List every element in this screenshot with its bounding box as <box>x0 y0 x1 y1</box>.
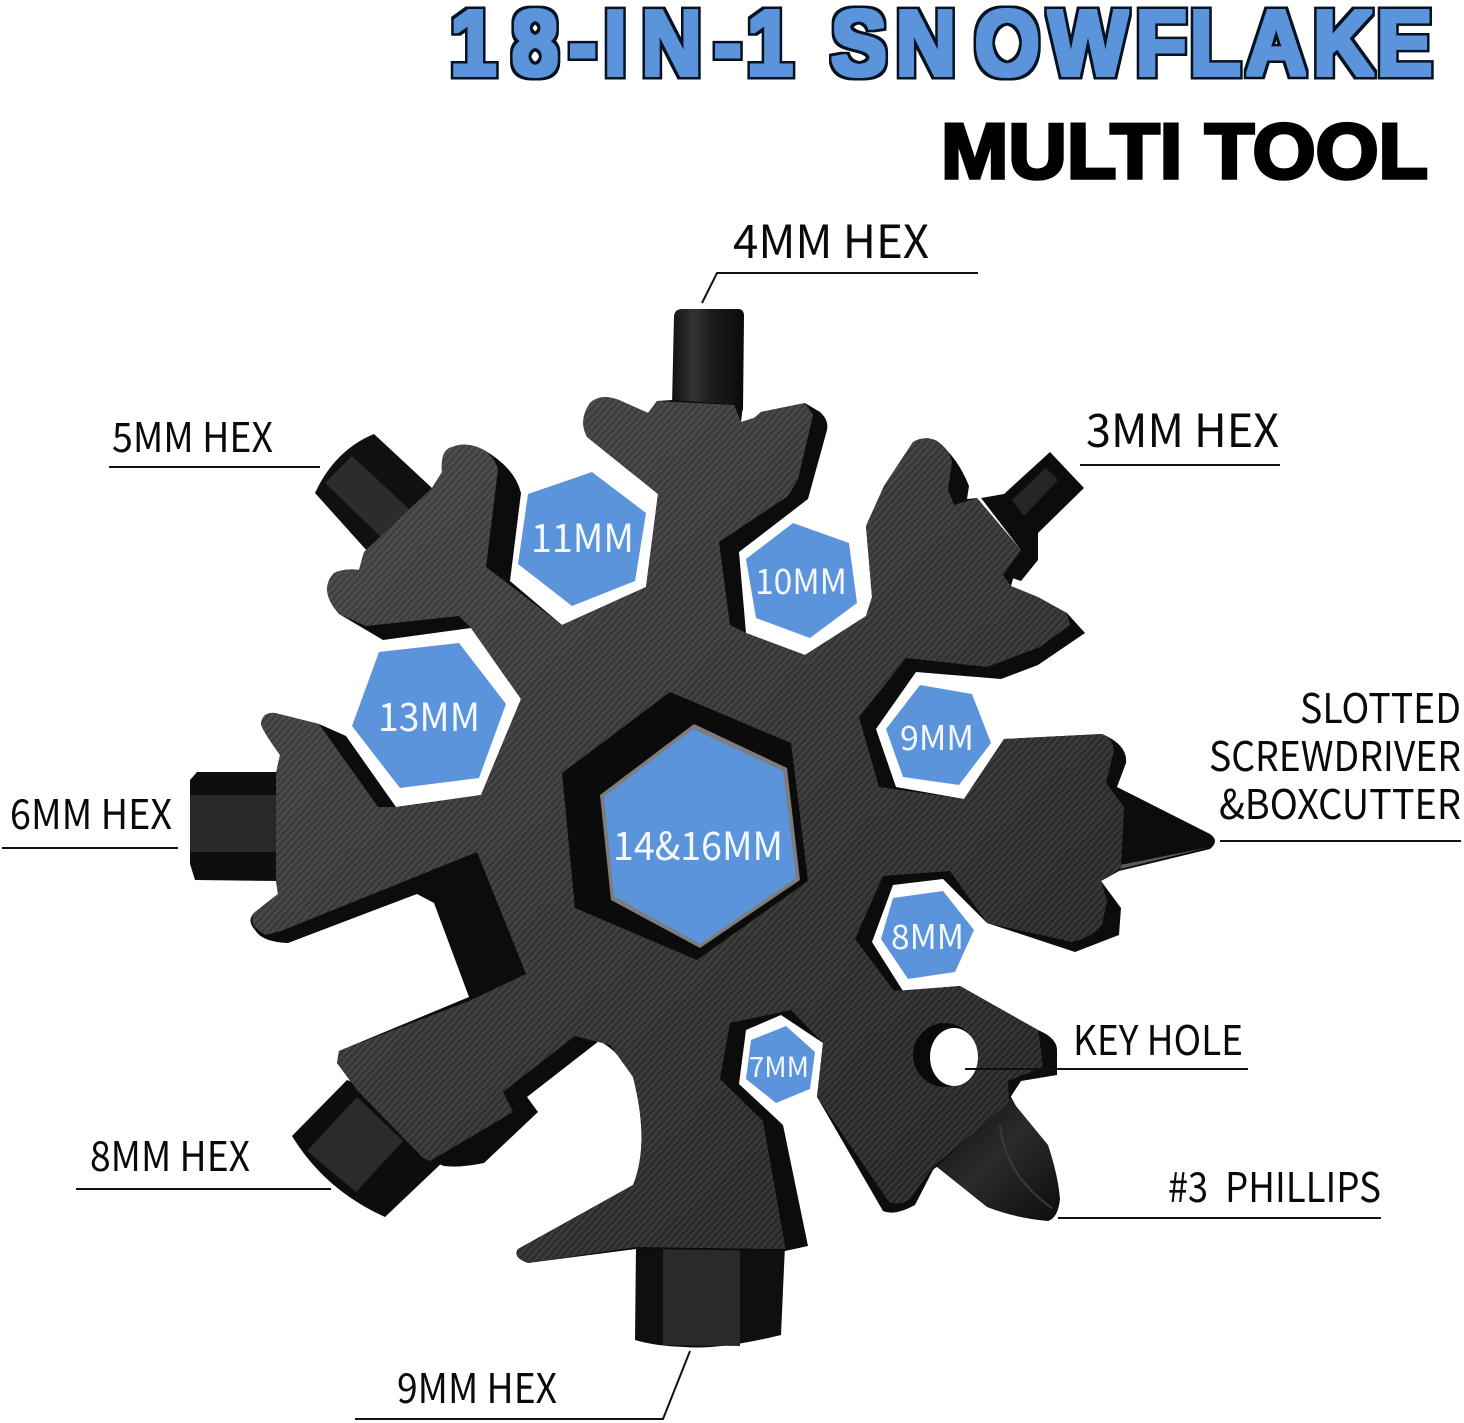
silhouette: dark metal side <box>250 397 1215 1263</box>
6mm hex bit <box>190 772 280 881</box>
key hole <box>913 1023 978 1087</box>
callout: 6mm hex: 6MM HEX <box>10 781 172 841</box>
title: 18-in-1 snowflake <box>450 0 1432 95</box>
callout: 9mm hex <box>355 1351 690 1419</box>
callout: 8mm hex: 8MM HEX <box>90 1123 250 1183</box>
hexagon: 9mm: 9MM <box>900 711 974 760</box>
hexagon: 14&16mm: 14&16MM <box>613 816 783 872</box>
brushed texture <box>252 397 1124 1263</box>
blade highlight <box>1120 847 1210 869</box>
callout: #3 phillips <box>1058 1154 1381 1218</box>
callout: slotted screwdriver and boxcutter <box>1209 675 1461 841</box>
hexagon: 13mm <box>352 643 506 788</box>
callout: #3 phillips: #3 <box>1168 1154 1208 1214</box>
hexagon: 8mm: 8MM <box>891 910 964 959</box>
callout: 5mm hex: 5MM HEX <box>112 404 273 464</box>
callout: 9mm hex: 9MM HEX <box>397 1355 557 1415</box>
icon: snowflake multi tool <box>190 309 1215 1348</box>
hexagon: 11mm: 11MM <box>531 508 634 564</box>
hexagon: 11mm <box>518 472 646 606</box>
hexagon: 10mm <box>746 523 857 638</box>
hexagon: 7mm <box>746 1026 815 1103</box>
hexagon: 10mm: 10MM <box>755 554 847 605</box>
8mm hex bit <box>292 1080 445 1217</box>
callout: #3 phillips: PHILLIPS <box>1225 1154 1381 1214</box>
phillips bit <box>930 1095 1060 1221</box>
hexagon: 7mm: 7MM <box>749 1046 809 1086</box>
3mm hex bit <box>981 452 1084 581</box>
4mm hex bit <box>672 309 744 410</box>
callout: key hole: KEY HOLE <box>1073 1007 1243 1067</box>
metal face <box>252 397 1124 1263</box>
central socket <box>562 692 808 960</box>
hexagon: 13mm: 13MM <box>378 687 480 743</box>
callout: 4mm hex: 4MM HEX <box>733 206 929 272</box>
callout: 3mm hex: 3MM HEX <box>1086 395 1279 461</box>
5mm hex bit <box>315 434 432 552</box>
hexagon: 8mm <box>881 891 974 979</box>
callout: 4mm hex <box>702 206 978 303</box>
subtitle: multi tool: MULTI TOOL <box>941 107 1428 195</box>
9mm hex bit <box>635 1245 785 1348</box>
hexagon: 9mm <box>886 685 991 785</box>
